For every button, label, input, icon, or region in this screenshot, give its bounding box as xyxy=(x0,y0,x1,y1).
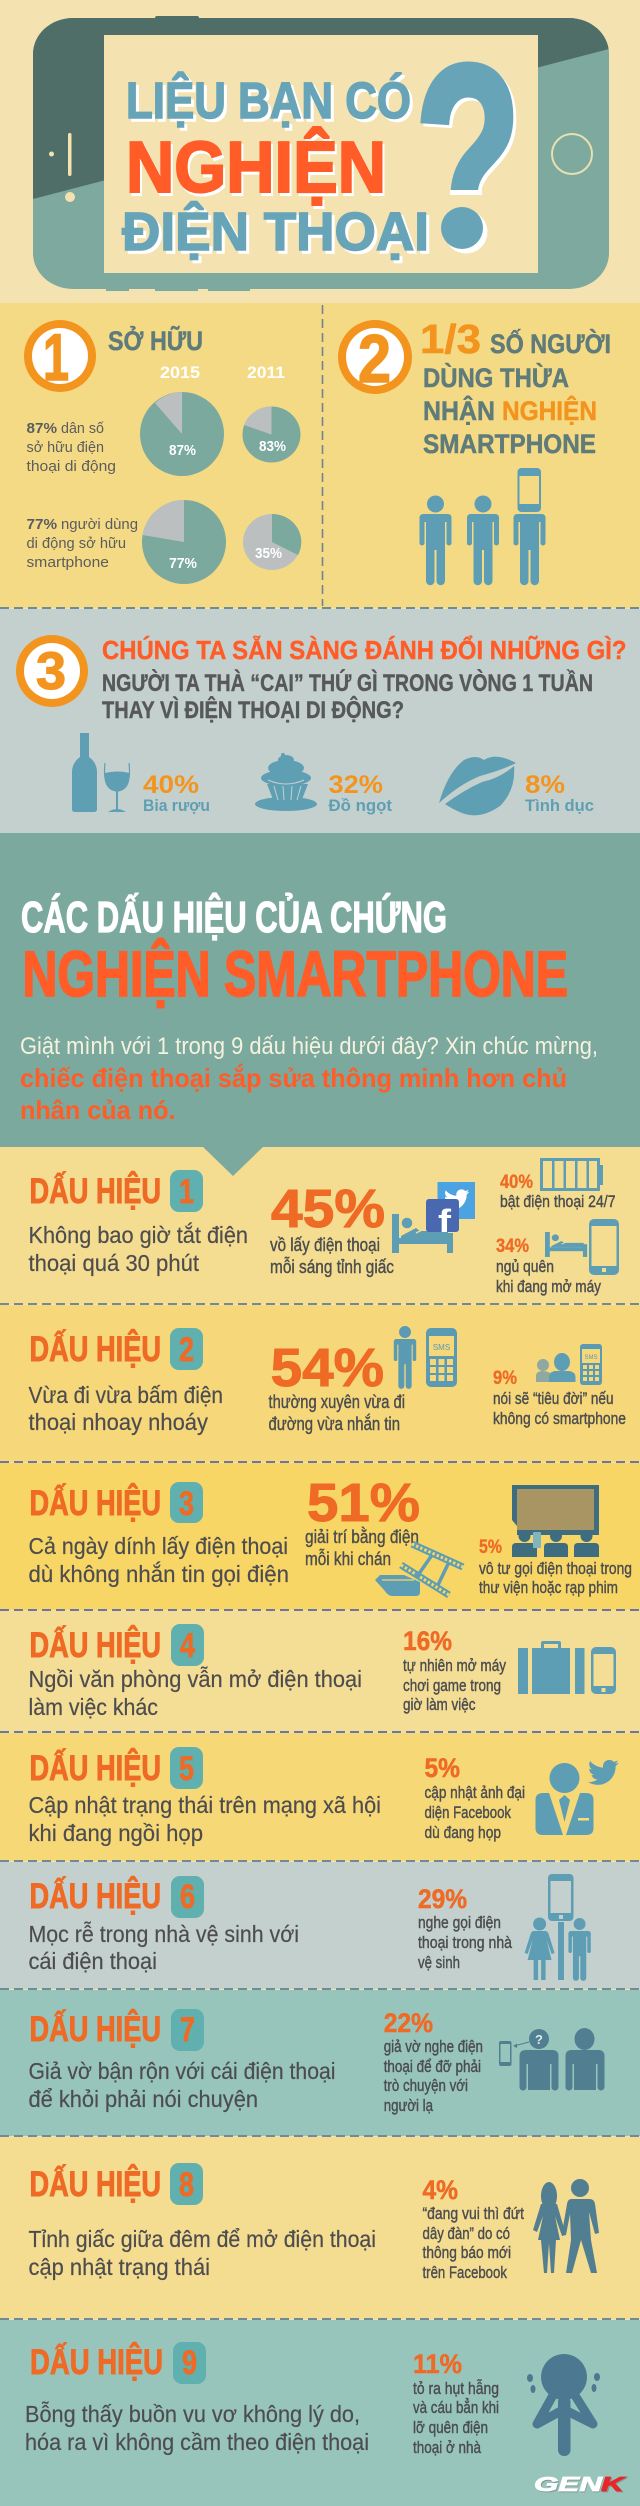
heading: 1/3 số người: SỐ NGƯỜI xyxy=(490,327,611,359)
heading: sign 2: DẤU HIỆU xyxy=(30,1329,161,1369)
text: 77% người dùng: người dùng xyxy=(61,516,138,533)
panel: sign 5 xyxy=(0,1733,640,1861)
panel: sign 1 xyxy=(0,1146,640,1304)
heading: sign 6: DẤU HIỆU xyxy=(30,1876,161,1916)
icon: battery xyxy=(540,1158,603,1191)
stat: 5% meetings xyxy=(424,1753,525,1842)
stat: 54% xyxy=(268,1338,405,1434)
icon: bed with social apps xyxy=(392,1182,475,1253)
stat: 34% asleep xyxy=(496,1236,602,1296)
title: text lines xyxy=(122,71,432,265)
icon: number 1 badge xyxy=(24,320,96,394)
description: sign 4: Ngồi văn phòng vẫn mở điện thoại xyxy=(28,1666,362,1692)
description: sign 3 xyxy=(28,1533,289,1587)
description: sign 5: khi đang ngồi họp xyxy=(28,1820,203,1846)
stat: 45%: mỗi sáng tỉnh giấc xyxy=(270,1256,394,1277)
panel: sign 3 xyxy=(0,1463,640,1610)
stat: 29%: vệ sinh xyxy=(418,1954,460,1972)
stat: 29% xyxy=(418,1884,513,1972)
icon: person walking xyxy=(394,1326,416,1389)
description: sign 3: dù không nhắn tin gọi điện xyxy=(28,1561,289,1587)
description: sign 1: Không bao giờ tắt điện xyxy=(28,1222,248,1248)
heading: sign 4: DẤU HIỆU xyxy=(30,1625,161,1665)
heading: 1/3 số người: NHẬN xyxy=(423,395,495,426)
icon: smartphone xyxy=(591,1647,616,1694)
panel: header phone illustration xyxy=(33,16,609,291)
icon: number 2 badge: 2 xyxy=(358,321,391,397)
heading: sign 4: 4 xyxy=(180,1627,195,1665)
logo: GENK xyxy=(534,2474,627,2497)
stat: 9%: 9% xyxy=(493,1368,517,1389)
icon: cupcake xyxy=(255,753,317,811)
heading: 1/3 số người xyxy=(420,316,611,459)
icon: number 3 badge xyxy=(16,635,88,707)
icon: two people and small phone: SMS xyxy=(584,1355,598,1361)
description: sign 2 xyxy=(28,1382,223,1435)
heading: sign 9: 9 xyxy=(182,2344,197,2382)
text: 87% dân số: 87% xyxy=(26,420,57,437)
description: sign 9: hóa ra vì không cầm theo điện thoại xyxy=(25,2429,369,2455)
stat: 11%: và cáu bẳn khi xyxy=(413,2398,499,2417)
icon: two strangers and a phone: ? xyxy=(535,2032,543,2047)
text: 87% dân số: dân số xyxy=(61,420,105,437)
stat: 16%: chơi game trong xyxy=(403,1677,501,1695)
icon: crying person xyxy=(527,2354,600,2456)
stat: 4%: thông báo mới xyxy=(422,2244,511,2262)
icon: number 1 badge: 1 xyxy=(43,320,69,394)
description: sign 7: Giả vờ bận rộn với cái điện thoại xyxy=(28,2058,336,2084)
stat: 29%: 29% xyxy=(418,1884,467,1914)
text: 77% người dùng: di động sở hữu xyxy=(26,535,126,552)
stat: 16% xyxy=(403,1626,507,1714)
stat: 51%: mỗi khi chán xyxy=(305,1548,391,1569)
heading: sign 1: DẤU HIỆU xyxy=(30,1171,161,1211)
icon: couple xyxy=(533,2179,599,2273)
icon: small bed xyxy=(545,1232,587,1257)
stat: 32% sweets: 32% xyxy=(328,771,383,799)
stat: 22%: 22% xyxy=(384,2008,433,2038)
panel: sign 4 xyxy=(0,1611,640,1732)
intro text: Giật mình với 1 trong 9 dấu hiệu dưới đây? Xin chúc mừng, xyxy=(20,1033,598,1060)
stat: 4%: dây đàn” do có xyxy=(422,2225,510,2243)
stat: 29%: nghe gọi điện xyxy=(418,1914,501,1932)
icon: SMS phone: SMS xyxy=(433,1343,450,1352)
stat: 29%: thoại trong nhà xyxy=(418,1934,513,1952)
heading: 1/3 số người: NGHIỆN xyxy=(502,395,597,426)
icon: smartphone xyxy=(589,1219,619,1275)
year labels: 2011 xyxy=(247,363,285,382)
heading: sign 7: 7 xyxy=(180,2011,195,2049)
heading: trade-off question: THAY VÌ ĐIỆN THOẠI DI ĐỘNG? xyxy=(102,696,404,724)
intro text: nhân của nó. xyxy=(20,1095,176,1125)
stat: 34% asleep: khi đang mở máy xyxy=(496,1278,602,1296)
heading: trade-off question xyxy=(102,635,626,724)
stat: 34% asleep: ngủ quên xyxy=(496,1258,554,1276)
icon: number 3 badge: 3 xyxy=(36,642,66,701)
panel: sign 6 xyxy=(0,1862,640,1989)
intro text: chiếc điện thoại sắp sửa thông minh hơn chủ xyxy=(20,1063,567,1093)
description: sign 1: thoại quá 30 phút xyxy=(28,1250,200,1276)
stat: 32% sweets xyxy=(328,771,392,815)
stat: 5% cinema xyxy=(479,1537,632,1597)
stat: 16%: giờ làm việc xyxy=(403,1696,476,1714)
stat: 5% meetings: dù đang họp xyxy=(424,1824,501,1842)
title: text lines: LIỆU BẠN CÓ xyxy=(126,71,411,129)
icon: bed with social apps: f xyxy=(438,1203,451,1239)
icon: two people and small phone xyxy=(536,1344,602,1385)
icon: lips xyxy=(439,757,516,815)
pie: 83% 2011 xyxy=(242,406,300,462)
stat: 51%: 51% xyxy=(307,1473,420,1533)
text: 87% dân số: thoại di động xyxy=(26,458,116,475)
icon: wine bottle and glass xyxy=(72,733,130,812)
logo: GENK: GENK xyxy=(535,2475,627,2497)
heading: sign 1: 1 xyxy=(179,1173,194,1211)
pie: 83% 2011: 83% xyxy=(259,438,286,455)
stat: 8% sex: Tình dục xyxy=(525,796,594,815)
stat: 45%: vồ lấy điện thoại xyxy=(270,1235,380,1255)
icon: briefcase xyxy=(518,1641,584,1694)
year labels xyxy=(160,363,285,382)
heading: sign 5: 5 xyxy=(179,1750,194,1788)
heading: sign 6: 6 xyxy=(180,1878,195,1916)
stat: 16%: 16% xyxy=(403,1626,452,1656)
stat: 22%: giả vờ nghe điện xyxy=(384,2038,483,2056)
description: sign 9: Bỗng thấy buồn vu vơ không lý do, xyxy=(25,2401,360,2427)
stat: 32% sweets: Đồ ngọt xyxy=(328,796,392,815)
pie: 87% 2015 xyxy=(140,392,224,476)
stat: 11%: thoại ở nhà xyxy=(413,2439,482,2457)
title: text lines: ĐIỆN THOẠI xyxy=(122,201,429,262)
stat: 34% asleep: 34% xyxy=(496,1236,529,1257)
stat: 11%: tỏ ra hụt hẫng xyxy=(413,2379,499,2398)
stat: 40% alcohol: 40% xyxy=(143,771,199,799)
stat: 4%: 4% xyxy=(422,2175,458,2205)
heading: sign 7: DẤU HIỆU xyxy=(30,2009,161,2049)
title: text lines: ĐIỆN THOẠI xyxy=(125,204,432,265)
stat: 11%: lỡ quên điện xyxy=(413,2419,488,2437)
stat: 40% alcohol xyxy=(143,771,210,815)
icon: number 2 badge xyxy=(338,320,412,397)
panel: signs intro xyxy=(0,833,640,1147)
stat: 9%: nói sẽ “tiêu đời” nếu xyxy=(493,1390,614,1408)
stat: 11%: 11% xyxy=(413,2349,462,2379)
stat: 45% xyxy=(270,1179,394,1277)
icon: cinema audience xyxy=(512,1485,599,1557)
icon: businessman xyxy=(536,1763,594,1835)
stat: 5% meetings: 5% xyxy=(424,1753,460,1783)
stat: 54%: 54% xyxy=(271,1338,384,1398)
stat: 5% meetings: diện Facebook xyxy=(424,1804,512,1822)
description: sign 2: thoại nhoay nhoáy xyxy=(28,1409,208,1435)
heading: sign 2: 2 xyxy=(179,1331,194,1369)
text: 77% người dùng: smartphone xyxy=(26,554,109,571)
icon: restroom sign with phone xyxy=(525,1874,591,1981)
stat: 45%: 45% xyxy=(271,1179,385,1239)
stat: 8% sex xyxy=(525,771,594,815)
stat: 22%: người lạ xyxy=(384,2097,434,2115)
pie: 77% 2015 xyxy=(142,500,226,584)
stat: 40% always on: bật điện thoại 24/7 xyxy=(500,1193,616,1211)
stat: 54%: thường xuyên vừa đi xyxy=(268,1392,405,1412)
year labels: 2015 xyxy=(160,363,200,382)
panel: sign 8 xyxy=(0,2137,640,2319)
panel: sign 2 xyxy=(0,1305,640,1462)
description: sign 6: cái điện thoại xyxy=(28,1948,157,1974)
description: sign 2: Vừa đi vừa bấm điện xyxy=(28,1382,223,1408)
intro text xyxy=(20,1033,598,1125)
logo: GENK: K xyxy=(601,2474,626,2496)
stat: 40% always on xyxy=(500,1172,616,1211)
heading: sign 3: DẤU HIỆU xyxy=(30,1483,161,1523)
description: sign 6: Mọc rễ trong nhà vệ sinh với xyxy=(28,1921,299,1947)
icon: SMS phone xyxy=(426,1328,457,1387)
heading: 1/3 số người: DÙNG THỪA xyxy=(423,362,569,393)
logo: GENK: GEN xyxy=(534,2474,603,2496)
stat: 9% xyxy=(493,1368,626,1428)
heading: các dấu hiệu: CÁC DẤU HIỆU CỦA CHỨNG xyxy=(21,891,447,942)
icon: two strangers and a phone xyxy=(499,2028,604,2090)
text: 87% dân số: sở hữu điện xyxy=(26,439,104,456)
description: sign 5: Cập nhật trạng thái trên mạng xã hội xyxy=(28,1792,381,1818)
stat: 22% xyxy=(384,2008,483,2115)
pie: 35% 2011 xyxy=(243,514,301,570)
pie: 77% 2015: 77% xyxy=(169,555,197,572)
panel: sign 7 xyxy=(0,1990,640,2136)
description: sign 8: cập nhật trạng thái xyxy=(28,2254,210,2280)
heading: 1/3 số người: 1/3 xyxy=(420,316,481,362)
heading: sign 3: 3 xyxy=(179,1485,194,1523)
text: 77% người dùng: 77% xyxy=(26,516,57,533)
stat: 51%: giải trí bằng điện xyxy=(305,1526,419,1547)
icon: film folder xyxy=(375,1544,463,1596)
icon: phone body xyxy=(33,16,609,291)
description: sign 5 xyxy=(28,1792,381,1846)
heading: sign 9: DẤU HIỆU xyxy=(30,2342,163,2382)
panel: sign 9 xyxy=(0,2320,640,2506)
icon: twitter bird xyxy=(588,1760,619,1785)
panel: section 3 trade-offs xyxy=(0,609,640,833)
title: question mark xyxy=(415,11,524,307)
stat: 4% xyxy=(422,2175,524,2282)
title: text lines: NGHIỆN xyxy=(126,127,386,208)
description: sign 7 xyxy=(28,2058,336,2112)
pie: 87% 2015: 87% xyxy=(169,442,196,459)
stat: 16%: tự nhiên mở máy xyxy=(403,1657,507,1675)
description: sign 1 xyxy=(28,1222,248,1276)
stat: 51% xyxy=(305,1473,420,1569)
stat: 11% xyxy=(413,2349,499,2457)
title: question mark: ? xyxy=(418,14,524,307)
heading: sign 5: DẤU HIỆU xyxy=(30,1748,161,1788)
description: sign 6 xyxy=(28,1921,299,1974)
description: sign 9 xyxy=(25,2401,369,2455)
stat: 54%: đường vừa nhắn tin xyxy=(268,1413,400,1434)
stat: 4%: “đang vui thì đứt xyxy=(422,2205,524,2223)
title: text lines: NGHIỆN xyxy=(128,130,388,211)
description: sign 7: để khỏi phải nói chuyện xyxy=(28,2086,258,2112)
stat: 8% sex: 8% xyxy=(525,771,565,799)
panel: sections 1 and 2 xyxy=(0,303,640,608)
text: 87% dân số xyxy=(26,420,116,475)
stat: 5% cinema: 5% xyxy=(479,1537,502,1558)
heading: sign 8: DẤU HIỆU xyxy=(30,2164,161,2204)
heading: 1/3 số người: SMARTPHONE xyxy=(423,429,596,459)
stat: 40% alcohol: Bia rượu xyxy=(143,796,210,815)
heading: sign 8: 8 xyxy=(179,2166,194,2204)
title: question mark: ? xyxy=(415,11,521,304)
description: sign 3: Cả ngày dính lấy điện thoại xyxy=(28,1533,288,1559)
stat: 4%: trên Facebook xyxy=(422,2264,508,2282)
description: sign 4: làm việc khác xyxy=(28,1694,158,1720)
description: sign 4 xyxy=(28,1666,362,1720)
pie: 35% 2011: 35% xyxy=(255,545,282,562)
stat: 22%: thoại để đỡ phải xyxy=(384,2058,481,2076)
text: 77% người dùng xyxy=(26,516,138,571)
description: sign 8: Tỉnh giấc giữa đêm để mở điện thoại xyxy=(28,2226,376,2252)
icon: three people, one with phone head xyxy=(420,468,546,585)
description: sign 8 xyxy=(28,2226,376,2280)
title: text lines: LIỆU BẠN CÓ xyxy=(129,74,414,132)
arrow: pointer from intro xyxy=(202,1146,264,1176)
heading: sở hữu: SỞ HỮU xyxy=(108,324,203,356)
stat: 22%: trò chuyện với xyxy=(384,2077,468,2095)
stat: 5% meetings: cập nhật ảnh đại xyxy=(424,1784,525,1802)
stat: 40% always on: 40% xyxy=(500,1172,533,1193)
